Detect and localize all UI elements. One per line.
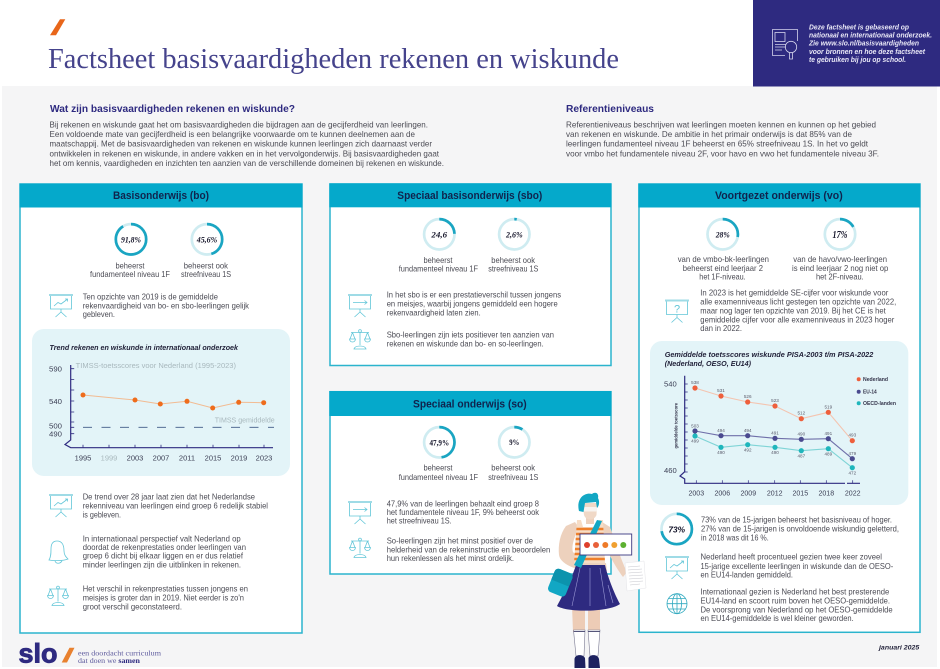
- x axis labels: 2015: [792, 488, 808, 497]
- text: SE-cijfer: alle examenniveaus licht gestegen ten opzichte van 2022,: [700, 296, 896, 306]
- text: trend over 28 jaar: is gebleven.: [83, 510, 121, 520]
- date: januari 2025: [878, 644, 920, 651]
- text: sbo-leerlingen: [387, 330, 554, 349]
- ring labels: streefniveau 1S: [488, 264, 539, 274]
- ring labels: beheerst ook: [491, 462, 536, 472]
- text: internationaal gezien: De voorsprong van Nederland op het OESO-gemiddelde: [700, 604, 893, 614]
- ring labels: is eind leerjaar 2 nog niet op: [792, 263, 889, 273]
- icon: scale: [350, 330, 370, 349]
- chart captions: TIMSS gemiddelde: [215, 416, 275, 425]
- text: verschil jongens en meisjes: meisjes is groter dan in 2019. Niet eerder is zo'n: [83, 592, 244, 602]
- ring labels: streefniveau 1S: [181, 269, 231, 279]
- x axis labels: 2022: [845, 488, 861, 497]
- chart captions: [76, 361, 275, 425]
- info text: [808, 22, 932, 64]
- text: internationaal perspectief: doordat de rekenprestaties onder leerlingen van: [83, 542, 246, 552]
- x axis labels: [688, 488, 861, 497]
- x axis labels: [75, 454, 272, 462]
- chart title: Trend rekenen en wiskunde in internationaal onderzoek: [50, 343, 239, 352]
- ring 9%: [499, 427, 530, 458]
- intro text: Bij rekenen en wiskunde gaat het om basisvaardigheden die bijdragen aan de gecijferdheid van leerlingen.: [50, 119, 428, 129]
- ring 47,9%: [424, 427, 454, 458]
- x axis labels: 2012: [767, 488, 783, 497]
- ring labels: beheerst: [116, 260, 145, 270]
- intro text: Een voldoende mate van gecijferdheid is een belangrijke voorwaarde om te kunnen deelnemen aan de: [50, 129, 415, 139]
- text: ten opzichte van 2019: gebleven.: [83, 309, 115, 319]
- ring labels: streefniveau 1S: [488, 472, 539, 482]
- ring labels: beheerst: [424, 462, 453, 472]
- text: internationaal perspectief: groep 6 dicht bij elkaar liggen en er dus relatief: [83, 551, 244, 561]
- ring labels: het 1F-niveau.: [699, 272, 746, 282]
- legend: EU-14: [863, 389, 877, 395]
- x axis labels: 1995: [75, 454, 91, 462]
- series EU-14: [691, 423, 857, 461]
- icon: scale: [350, 538, 370, 558]
- ring labels: [90, 260, 231, 279]
- series Nederland: 526: [744, 394, 752, 399]
- referentieniveaus heading: Referentieniveaus: [566, 103, 654, 115]
- panel: voortgezet onderwijs: [638, 184, 920, 632]
- text: internationaal gezien: [700, 587, 893, 623]
- text: 47,9% van de leerlingen: [387, 498, 540, 526]
- text: SE-cijfer: gemiddelde cijfer voor alle examenniveaus in 2023 hoger: [700, 314, 895, 324]
- ring 91,8%: 91,8%: [121, 234, 141, 244]
- striped top: [574, 520, 605, 563]
- ring labels: van de vmbo-bk-leerlingen: [678, 254, 769, 264]
- y axis labels: [664, 380, 678, 475]
- glasses: [583, 507, 597, 512]
- skirt: [557, 565, 620, 611]
- ring labels: fundamenteel niveau 1F: [399, 264, 478, 274]
- ring 45,6%: [192, 224, 222, 254]
- tagline: [78, 648, 161, 665]
- series Nederland: 538: [691, 380, 699, 385]
- y axis labels: 540: [664, 380, 677, 388]
- y axis labels: 460: [664, 466, 677, 475]
- series OECD-landen: 489: [824, 452, 833, 456]
- text: excellente leerlingen: Nederland heeft procentueel gezien twee keer zoveel: [700, 552, 882, 562]
- chart title: [665, 350, 874, 368]
- y axis labels: 540: [49, 397, 62, 406]
- referentieniveaus text: leerlingen fundamenteel niveau 1F beheerst en 65% streefniveau 1S. In het vo geldt: [566, 139, 869, 149]
- text: so-leerlingen: hun rekenlessen als het minst ordelijk.: [387, 553, 514, 563]
- icon: presentation chart: [49, 294, 73, 317]
- info text: Zie www.slo.nl/basisvaardigheden: [808, 38, 919, 48]
- info text: voor bronnen en hoe deze factsheet: [809, 47, 926, 56]
- text: trend over 28 jaar: De trend over 28 jaar laat zien dat het Nederlandse: [83, 492, 255, 502]
- series EU-14: 491: [771, 431, 779, 436]
- ring 2,6%: [499, 219, 530, 250]
- series OECD-landen: 487: [797, 454, 806, 458]
- ring 45,6%: 45,6%: [196, 234, 217, 244]
- referentieniveaus text: [566, 119, 879, 158]
- hair: [578, 493, 599, 512]
- ring labels: [678, 254, 889, 282]
- text: prestatieverschil: [387, 290, 561, 318]
- line series Nederland: [80, 392, 266, 410]
- text: 73% van de 15-jarigen: 73% van de 15-jarigen beheerst het basisniveau of hoger.: [701, 515, 892, 525]
- icon: presentation question: ?: [674, 304, 680, 316]
- intro text: ontwikkelen in rekenen en wiskunde, in andere vakken en in het vervolgonderwijs. Bij basisvaardigheden gaat: [50, 148, 440, 158]
- text: internationaal perspectief: [83, 534, 246, 570]
- text: excellente leerlingen: 15-jarige excellente leerlingen in wiskunde dan de OESO-: [700, 561, 894, 571]
- text: prestatieverschil: rekenvaardigheid laten zien.: [387, 308, 481, 318]
- series EU-14: 490: [797, 432, 806, 437]
- ring labels: [399, 255, 539, 274]
- ring 28%: 28%: [715, 229, 730, 239]
- tagline: dat doen we samen: [78, 656, 141, 665]
- text: verschil jongens en meisjes: Het verschil in rekenprestaties tussen jongens en: [83, 584, 248, 594]
- paper sheet: [625, 561, 646, 591]
- logo slash: [62, 648, 74, 662]
- series EU-14: 494: [744, 428, 752, 433]
- ring 73%: [662, 514, 692, 544]
- info box: [753, 0, 940, 86]
- bag: [547, 568, 574, 598]
- text: SE-cijfer: [700, 287, 896, 333]
- text: internationaal gezien: en EU14-gemiddelde is wel kleiner geworden.: [700, 613, 854, 623]
- icon: globe: [667, 594, 687, 614]
- text: ten opzichte van 2019: Ten opzichte van 2019 is de gemiddelde: [83, 292, 218, 302]
- icon: presentation chart 3: [665, 556, 689, 579]
- text: ten opzichte van 2019: rekenvaardigheid van bo- en sbo-leerlingen gelijk: [83, 300, 250, 310]
- text: prestatieverschil: en meisjes, waarbij jongens gemiddeld een hogere: [387, 299, 558, 309]
- series OECD-landen: 490: [771, 450, 779, 455]
- text: excellente leerlingen: [700, 552, 894, 579]
- chart axes: [65, 365, 273, 448]
- text: prestatieverschil: In het sbo is er een prestatieverschil tussen jongens: [387, 290, 561, 300]
- x axis labels: 1999: [101, 454, 117, 462]
- icon: presentation arrow: [348, 294, 372, 317]
- panel heading so: Speciaal onderwijs (so): [413, 398, 527, 410]
- series Nederland: 523: [771, 398, 779, 403]
- ring 28%: [708, 219, 738, 250]
- y axis labels: [49, 364, 62, 438]
- chart: PISA scores: [650, 341, 908, 505]
- ring 17%: 17%: [832, 230, 848, 241]
- x axis labels: 2003: [688, 488, 704, 497]
- referentieniveaus text: voor vmbo het fundamentele niveau 2F, voor havo en vwo het fundamentele niveau 3F.: [566, 148, 879, 158]
- icon: presentation arrow: [348, 501, 372, 524]
- logo: [18, 638, 161, 668]
- text: excellente leerlingen: en EU14-landen gemiddeld.: [700, 569, 793, 579]
- panel heading vo: Voortgezet onderwijs (vo): [715, 190, 843, 202]
- ring labels: beheerst ook: [184, 260, 229, 270]
- series EU-14: 503: [691, 423, 699, 428]
- x axis labels: 2006: [714, 488, 730, 497]
- series OECD-landen: 472: [848, 470, 857, 476]
- text: 73% van de 15-jarigen: 27% van de 15-jarigen is onvoldoende wiskundig geletterd,: [701, 524, 899, 534]
- orange slash accent: [50, 19, 65, 35]
- series Nederland: 512: [797, 411, 806, 416]
- series EU-14: 494: [717, 428, 725, 433]
- referentieniveaus text: Referentieniveaus beschrijven wat leerlingen moeten kennen en kunnen op het gebied: [566, 119, 876, 129]
- legs: [572, 606, 600, 632]
- info text: te gebruiken bij jou op school.: [809, 55, 906, 64]
- ring labels: [399, 462, 539, 482]
- text: 47,9% van de leerlingen: het fundamentele niveau 1F, 9% beheerst ook: [387, 507, 540, 517]
- x axis labels: 2019: [231, 454, 247, 462]
- text: 47,9% van de leerlingen: het streefniveau 1S.: [387, 516, 452, 526]
- title: Factsheet basisvaardigheden rekenen en wiskunde: [48, 43, 619, 75]
- skirt pleats: [572, 568, 613, 606]
- text: so-leerlingen: So-leerlingen zijn het minst positief over de: [387, 536, 533, 546]
- socks: [574, 630, 600, 656]
- chart title: Gemiddelde toetsscores wiskunde PISA-2003 t/m PISA-2022: [665, 350, 874, 359]
- referentieniveaus text: van rekenen en wiskunde. De ambitie in het primair onderwijs is dat 85% van de: [566, 129, 852, 139]
- text: sbo-leerlingen: Sbo-leerlingen zijn iets positiever ten aanzien van: [387, 330, 554, 340]
- shoulder strap: [574, 520, 602, 568]
- face: [582, 503, 597, 520]
- ring 9%: 9%: [509, 437, 519, 447]
- text: internationaal gezien: EU14-land en scoort ruim boven het OESO-gemiddelde.: [700, 595, 890, 605]
- text: so-leerlingen: helderheid van de rekeninstructie en beoordelen: [387, 544, 551, 554]
- y axis labels: 490: [49, 430, 62, 438]
- text: so-leerlingen: [387, 536, 551, 563]
- text: SE-cijfer: maar nog lager ten opzichte van 2019. Bij het CE is het: [700, 305, 886, 315]
- intro: referentieniveaus: [566, 103, 879, 158]
- series Nederland: 519: [824, 404, 833, 409]
- icon: document with magnifier: [772, 30, 798, 59]
- x axis labels: 2003: [127, 454, 143, 462]
- y axis labels: gemiddelde toetsscore: [673, 402, 678, 449]
- x axis labels: 2007: [153, 454, 169, 462]
- series EU-14: 491: [824, 431, 833, 436]
- ring labels: het 2F-niveau.: [816, 272, 864, 282]
- legend: OECD-landen: [863, 401, 896, 407]
- info text: nationaal en internationaal onderzoek.: [809, 30, 932, 40]
- illustration: student with feedback card: [547, 493, 646, 668]
- shoes: [574, 655, 600, 668]
- panel heading sbo: Speciaal basisonderwijs (sbo): [397, 190, 543, 202]
- intro text: het om kennis, vaardigheden en inzichten ten aanzien van de verschillende domeinen bij rekenen en wiskunde.: [50, 158, 444, 168]
- text: 73% van de 15-jarigen: in 2018 was dit 16 %.: [701, 532, 769, 542]
- chart captions: TIMSS-toetsscores voor Nederland (1995-2023): [76, 361, 236, 370]
- ring labels: fundamenteel niveau 1F: [90, 269, 170, 279]
- intro text: [50, 119, 444, 168]
- intro: wat zijn basisvaardigheden: [50, 103, 444, 168]
- text: SE-cijfer: In 2023 is het gemiddelde SE-cijfer voor wiskunde voor: [700, 287, 889, 297]
- y axis labels: 590: [49, 364, 62, 374]
- text: verschil jongens en meisjes: [83, 584, 248, 612]
- chart title: (Nederland, OESO, EU14): [665, 359, 751, 368]
- text: SE-cijfer: dan in 2022.: [700, 323, 742, 333]
- icon: presentation question: [665, 300, 689, 322]
- logo wordmark: slo: [18, 638, 58, 668]
- text: internationaal gezien: Internationaal gezien is Nederland het best presterende: [700, 587, 890, 597]
- x axis labels: 2023: [256, 454, 272, 462]
- x axis labels: 2011: [179, 454, 195, 462]
- ring 17%: [825, 219, 855, 250]
- ring labels: beheerst ook: [491, 255, 536, 265]
- ring 91,8%: [116, 224, 146, 254]
- x axis labels: 2009: [740, 488, 756, 497]
- series OECD-landen: 492: [744, 448, 752, 452]
- ring labels: van de havo/vwo-leerlingen: [793, 254, 887, 264]
- ring 2,6%: 2,6%: [505, 229, 523, 239]
- legend: Nederland: [863, 377, 888, 383]
- text: trend over 28 jaar: [83, 492, 268, 520]
- x axis labels: 2015: [205, 454, 221, 462]
- series OECD-landen: 490: [717, 450, 725, 455]
- panel: speciaal onderwijs: [329, 391, 611, 574]
- series EU-14: 479: [848, 451, 857, 456]
- series OECD-landen: [691, 433, 857, 476]
- series OECD-landen: 499: [691, 438, 699, 444]
- series Nederland: 493: [848, 433, 857, 438]
- ring 24,6: 24,6: [430, 229, 448, 239]
- ring labels: beheerst: [424, 255, 453, 265]
- text: trend over 28 jaar: rekenniveau van leerlingen eind groep 6 redelijk stabiel: [83, 501, 268, 511]
- series Nederland: 531: [717, 388, 725, 393]
- y axis labels: 500: [49, 422, 62, 430]
- x axis labels: 2018: [818, 488, 834, 497]
- average line: [83, 426, 274, 428]
- icon: presentation chart 2: [49, 494, 73, 517]
- chart: TIMSS trend: [32, 329, 290, 476]
- header: [48, 19, 619, 75]
- ring labels: fundamenteel niveau 1F: [399, 472, 478, 482]
- series Nederland: [691, 380, 857, 443]
- text: internationaal perspectief: minder leerlingen zijn die uitblinken in rekenen.: [83, 560, 241, 570]
- ring 73%: 73%: [668, 524, 685, 534]
- text: internationaal perspectief: In internationaal perspectief valt Nederland op: [83, 534, 241, 544]
- text: 47,9% van de leerlingen: 47,9% van de leerlingen behaalt eind groep 8: [387, 498, 539, 508]
- ring 24,6: [424, 219, 454, 250]
- icon: scale: [48, 586, 68, 606]
- info text: Deze factsheet is gebaseerd op: [809, 22, 909, 32]
- tagline: een doordacht curriculum: [78, 648, 161, 657]
- neck and arms: [559, 512, 627, 577]
- panel heading bo: Basisonderwijs (bo): [113, 190, 209, 202]
- text: ten opzichte van 2019: [83, 292, 250, 319]
- intro heading: Wat zijn basisvaardigheden rekenen en wiskunde?: [50, 103, 295, 115]
- text: 73% van de 15-jarigen: [701, 515, 899, 542]
- ring 47,9%: 47,9%: [429, 437, 449, 447]
- feedback card: [580, 534, 632, 555]
- intro text: maatschappij. Met de basisvaardigheden van rekenen en wiskunde kunnen leerlingen zich daarnaast verder: [50, 139, 432, 149]
- ring labels: beheerst eind leerjaar 2: [683, 263, 763, 273]
- chart axes: [680, 376, 860, 483]
- panel: speciaal basisonderwijs: [329, 183, 611, 366]
- text: sbo-leerlingen: rekenen en wiskunde dan bo- en so-leerlingen.: [387, 339, 544, 349]
- legend: [857, 377, 896, 407]
- text: verschil jongens en meisjes: groot verschil geconstateerd.: [83, 602, 182, 612]
- panel: basisonderwijs: [20, 184, 302, 633]
- icon: bell: [49, 541, 68, 563]
